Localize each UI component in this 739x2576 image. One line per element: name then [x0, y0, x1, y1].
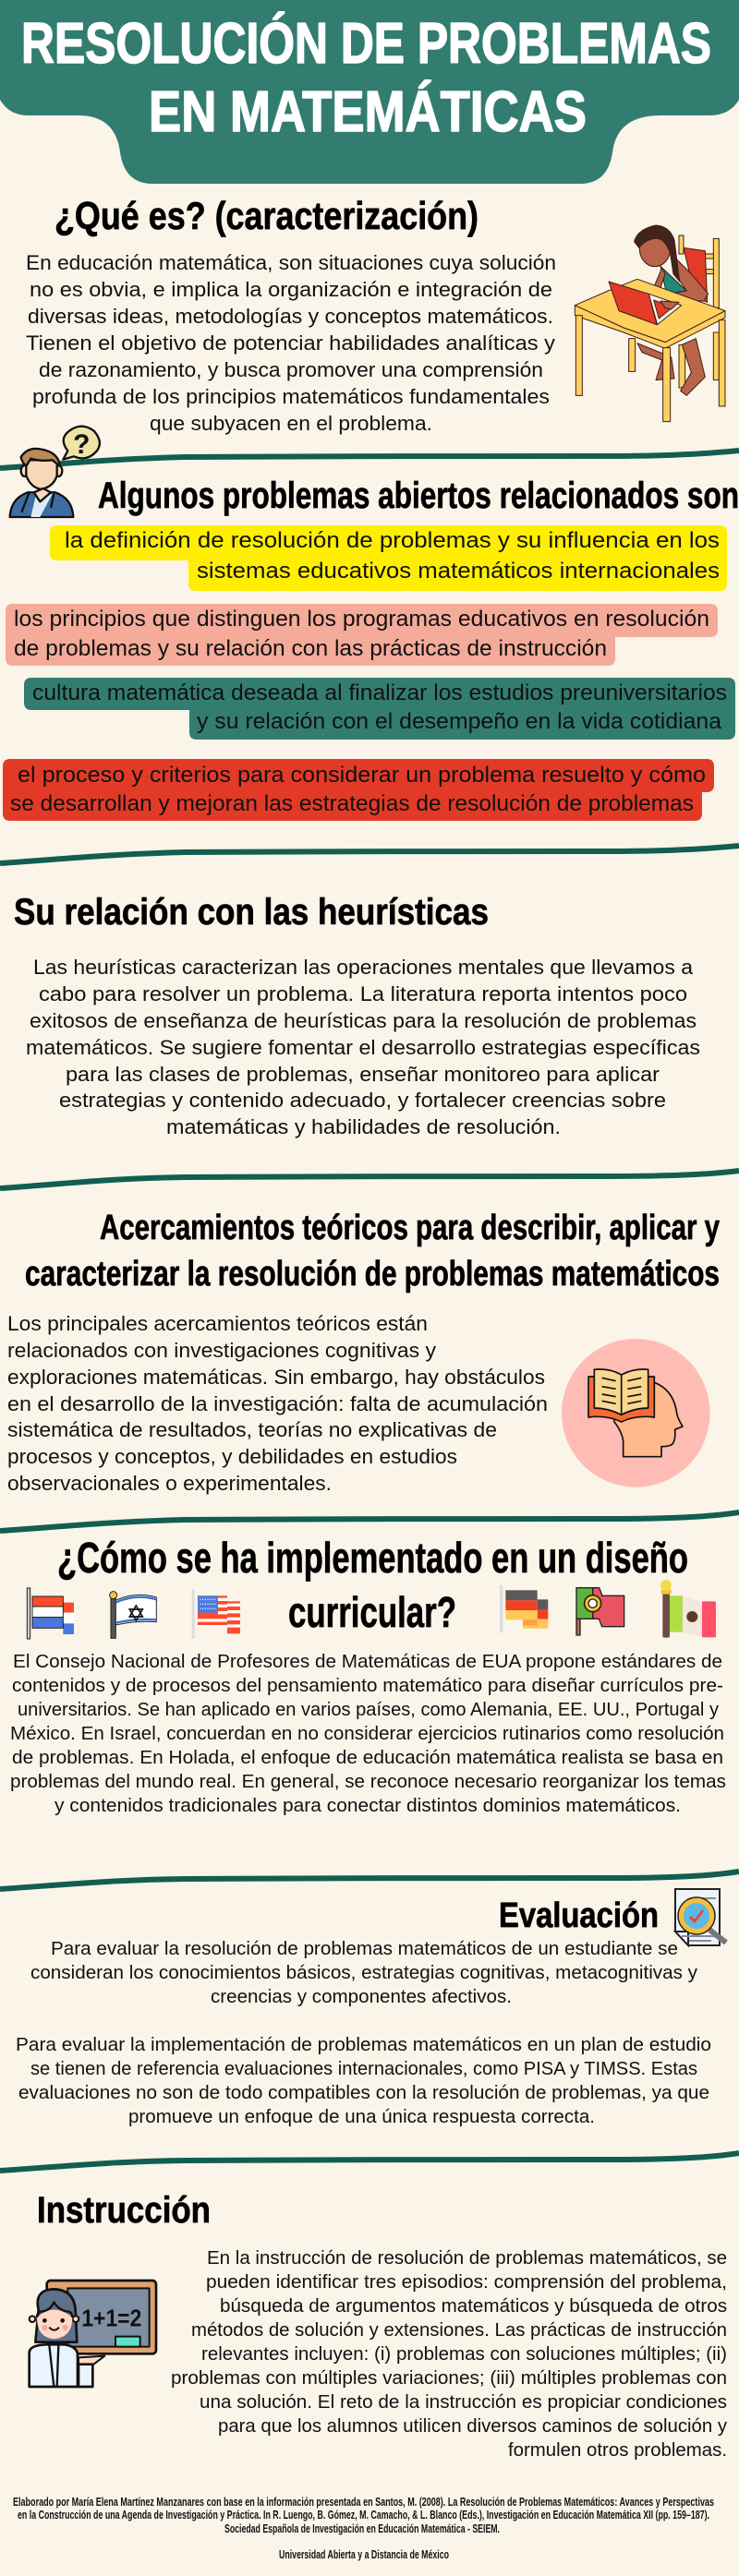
heading: instrucción: Instrucción	[37, 2190, 211, 2231]
text block: qué es: profunda de los principios matemáticos fundamentales	[32, 385, 550, 408]
icon: flag Portugal	[576, 1588, 624, 1635]
icon: head with book	[562, 1339, 710, 1487]
text block: diseño curricular: y contenidos tradicionales para conectar distintos dominios matemáticos.	[55, 1795, 681, 1816]
panel: teal problem: y su relación con el desempeño en la vida cotidiana	[197, 709, 722, 734]
text block: diseño curricular: México. En Israel, concuerdan en no considerar ejercicios rutinarios como resolución	[10, 1723, 724, 1744]
text block: diseño curricular: problemas del mundo real. En general, se reconoce necesario reorganizar los temas	[10, 1771, 726, 1792]
heading: diseño curricular: curricular?	[288, 1588, 456, 1636]
text block: evaluación estudiante: consideran los conocimientos básicos, estrategias cognitivas, metacognitivas y	[30, 1962, 698, 1983]
text block: qué es: Tienen el objetivo de potenciar habilidades analíticas y	[26, 331, 555, 355]
panel: pink problem: de problemas y su relación con las prácticas de instrucción	[14, 636, 607, 661]
text block: instrucción: una solución. El reto de la instrucción es propiciar condiciones	[200, 2391, 727, 2413]
panel: red problem: el proceso y criterios para considerar un problema resuelto y cómo	[18, 763, 706, 788]
icon: flag Germany	[500, 1585, 548, 1632]
text block: heurísticas: estrategias y contenido adecuado, y fortalecer creencias sobre	[59, 1089, 666, 1112]
text block: acercamientos: procesos y conceptos, y debilidades en estudios	[7, 1445, 457, 1468]
divider	[0, 2153, 739, 2171]
footer: credits and reference	[13, 2495, 714, 2561]
icon: evaluation magnifier	[675, 1889, 726, 1945]
text block: acercamientos: sistemática de resultados, teorías no explicativas de	[7, 1418, 497, 1441]
text block: acercamientos: exploraciones matemáticas. Sin embargo, hay obstáculos	[7, 1366, 545, 1389]
heading: qué es: ¿Qué es? (caracterización)	[55, 194, 479, 237]
title banner	[0, 0, 739, 184]
divider	[0, 451, 739, 468]
text block: diseño curricular	[10, 1651, 726, 1816]
panel: teal problem	[24, 678, 735, 740]
text block: evaluación estudiante: creencias y componentes afectivos.	[211, 1986, 512, 2007]
text block: evaluación estudiante: Para evaluar la resolución de problemas matemáticos de un estudiante se	[51, 1938, 678, 1959]
icon: teacher at chalkboard	[30, 2281, 156, 2387]
panel: yellow problem: la definición de resolución de problemas y su influencia en los	[65, 528, 720, 553]
text block: diseño curricular: universitarios. Se han aplicado en varios países, como Alemania, EE. UU., Portugal y	[18, 1699, 720, 1720]
icon: flag USA	[192, 1590, 240, 1639]
text block: acercamientos: en el desarrollo de la investigación: falta de acumulación	[7, 1392, 548, 1415]
title banner: EN MATEMÁTICAS	[149, 80, 587, 144]
footer: credits and reference: Universidad Abierta y a Distancia de México	[279, 2547, 449, 2561]
panel: yellow problem: sistemas educativos matemáticos internacionales	[197, 559, 720, 584]
text block: acercamientos	[7, 1312, 548, 1495]
text block: instrucción: relevantes incluyen: (i) problemas con soluciones múltiples; (ii)	[201, 2343, 727, 2365]
text block: qué es: diversas ideas, metodologías y conceptos matemáticos.	[28, 305, 553, 328]
text block: instrucción: pueden identificar tres episodios: comprensión del problema,	[206, 2271, 727, 2293]
text block: evaluación plan de estudio: Para evaluar la implementación de problemas matemáticos en un plan de estudio	[16, 2034, 711, 2055]
text block: instrucción: En la instrucción de resolución de problemas matemáticos, se	[207, 2247, 727, 2269]
text block: qué es: En educación matemática, son situaciones cuya solución	[26, 251, 556, 274]
text block: qué es: que subyacen en el problema.	[150, 412, 432, 435]
icon: flag Mexico	[660, 1580, 716, 1638]
text block: diseño curricular: El Consejo Nacional de Profesores de Matemáticas de EUA propone estándares de	[13, 1651, 722, 1672]
panel: pink problem	[6, 604, 718, 666]
panel: red problem: se desarrollan y mejoran las estrategias de resolución de problemas	[10, 791, 694, 816]
text block: evaluación plan de estudio	[16, 2034, 711, 2127]
heading: heurísticas: Su relación con las heurísticas	[14, 892, 489, 933]
text block: instrucción: búsqueda de argumentos matemáticos y búsqueda de otros	[220, 2295, 727, 2317]
icon: man with question bubble: ?	[73, 429, 90, 460]
text block: instrucción: métodos de solución y extensiones. Las prácticas de instrucción	[191, 2319, 727, 2341]
divider	[0, 846, 739, 863]
text block: acercamientos: Los principales acercamientos teóricos están	[7, 1312, 428, 1335]
text block: instrucción: formulen otros problemas.	[508, 2439, 727, 2461]
text block: evaluación estudiante	[30, 1938, 698, 2007]
text block: qué es: de razonamiento, y busca promover una comprensión	[39, 358, 543, 381]
panel: yellow problem	[50, 525, 727, 591]
divider	[0, 1872, 739, 1889]
text block: instrucción	[171, 2247, 728, 2461]
heading: diseño curricular	[57, 1534, 688, 1636]
icon: flag Israel	[110, 1592, 156, 1638]
text block: diseño curricular: contenidos y de procesos del pensamiento matemático para diseñar currículos pre-	[12, 1675, 723, 1696]
divider	[0, 1171, 739, 1188]
text block: instrucción: para que los alumnos utilicen diversos caminos de solución y	[218, 2415, 728, 2437]
text block: qué es: no es obvia, e implica la organización e integración de	[30, 278, 552, 301]
text block: heurísticas: cabo para resolver un problema. La literatura reporta intentos poco	[39, 982, 687, 1005]
text block: evaluación plan de estudio: promueve un enfoque de una única respuesta correcta.	[128, 2106, 595, 2127]
heading: acercamientos teóricos	[25, 1209, 720, 1294]
text block: acercamientos: relacionados con investigaciones cognitivas y	[7, 1339, 436, 1362]
text block: diseño curricular: de problemas. En Holada, el enfoque de educación matemática realista se basa en	[12, 1747, 723, 1768]
text block: heurísticas: Las heurísticas caracterizan las operaciones mentales que llevamos a	[33, 956, 694, 979]
text block: heurísticas: matemáticas y habilidades de resolución.	[166, 1115, 561, 1138]
panel: pink problem: los principios que distinguen los programas educativos en resolución	[14, 607, 709, 632]
panel: teal problem: cultura matemática deseada al finalizar los estudios preuniversitarios	[32, 680, 727, 705]
icon: girl with laptop at desk	[575, 225, 725, 422]
footer: credits and reference: Sociedad Española de Investigación en Educación Matemática - SEIEM.	[224, 2522, 500, 2535]
text block: evaluación plan de estudio: evaluaciones no son de todo compatibles con la resolución de problemas, ya que	[18, 2082, 709, 2103]
heading: evaluación: Evaluación	[499, 1896, 659, 1935]
text block: instrucción: problemas con múltiples variaciones; (iii) múltiples problemas con	[171, 2367, 727, 2389]
text block: qué es	[26, 251, 556, 435]
text block: acercamientos: observacionales o experimentales.	[7, 1472, 332, 1495]
icon: man with question bubble	[10, 427, 100, 517]
text block: heurísticas	[26, 956, 700, 1138]
divider	[0, 1512, 739, 1531]
text block: evaluación plan de estudio: se tienen de referencia evaluaciones internacionales, como PISA y TIMSS. Estas	[30, 2058, 697, 2079]
text block: heurísticas: para las clases de problemas, enseñar monitoreo para aplicar	[66, 1063, 660, 1086]
text block: heurísticas: exitosos de enseñanza de heurísticas para la resolución de problemas	[30, 1009, 697, 1032]
icon: teacher at chalkboard: 1+1=2	[81, 2304, 141, 2331]
panel: red problem	[3, 759, 714, 821]
text block: heurísticas: matemáticos. Se sugiere fomentar el desarrollo estrategias específicas	[26, 1036, 700, 1059]
icon: flag Netherlands	[27, 1588, 74, 1639]
